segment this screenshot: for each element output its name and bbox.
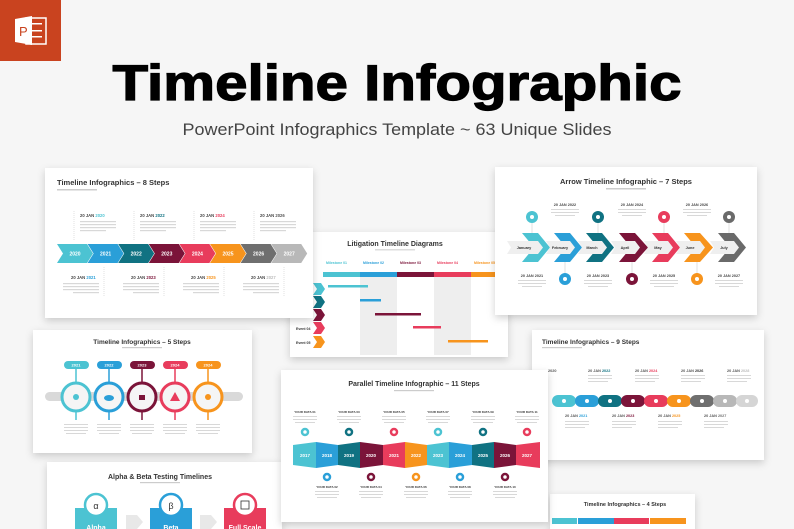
chevrons: 8 years: 2024 xyxy=(192,252,203,258)
chevrons: months: April xyxy=(621,246,629,250)
panel: arrow timeline 7 steps: Arrow Timeline Infographic – 7 Steps xyxy=(560,177,692,186)
panel: timeline 9 steps: 20 JAN 2025 xyxy=(658,414,680,418)
year blocks: 2023 xyxy=(433,453,444,458)
panel: arrow timeline 7 steps: 20 JAN 2023 xyxy=(587,274,609,278)
panel: timeline 5 steps: 2021 xyxy=(72,362,81,368)
panel: timeline 9 steps xyxy=(532,330,764,460)
panel: timeline 9 steps: 20 JAN 2026 xyxy=(681,369,703,373)
panel: parallel timeline 11 steps: YOUR DATA 01 xyxy=(294,410,316,414)
chevrons: months: January xyxy=(517,246,532,250)
year blocks: 2024 xyxy=(455,453,466,458)
chevrons: 8 years: 2022 xyxy=(131,252,142,258)
panel: timeline 9 steps: 2020 xyxy=(548,369,556,373)
panel: timeline 9 steps: 20 JAN 2028 xyxy=(727,369,749,373)
panel: litigation timeline xyxy=(290,232,508,357)
panel: timeline 4 steps xyxy=(550,494,695,529)
panel: timeline 5 steps: Timeline Infographics – 5 Steps xyxy=(93,339,191,346)
panel: timeline 8 steps xyxy=(45,168,313,318)
panel: arrow timeline 7 steps: 20 JAN 2024 xyxy=(621,203,644,207)
panel: timeline 8 steps: Timeline Infographics – 8 Steps xyxy=(57,178,169,187)
panel: litigation timeline: Event 04 xyxy=(296,327,310,331)
panel: parallel timeline 11 steps: YOUR DATA 09 xyxy=(472,410,494,414)
chevrons: months xyxy=(507,233,746,262)
panel: litigation timeline: Event 05 xyxy=(296,341,310,345)
year blocks: 2026 xyxy=(500,453,511,458)
chevrons: months: March xyxy=(586,246,598,250)
panel: parallel timeline 11 steps: YOUR DATA 08 xyxy=(449,485,471,489)
chevrons: 8 years: 2025 xyxy=(222,252,234,258)
panel: arrow timeline 7 steps: 20 JAN 2026 xyxy=(686,203,708,207)
panel: parallel timeline 11 steps: Parallel Timeline Infographic – 11 Steps xyxy=(348,381,480,388)
panel: timeline 9 steps: 20 JAN 2023 xyxy=(612,414,634,418)
chevrons: 8 years: 2021 xyxy=(100,252,111,258)
panel: parallel timeline 11 steps: YOUR DATA 07 xyxy=(427,410,449,414)
panel: timeline 8 steps: 20 JAN 2023 xyxy=(131,275,156,280)
chevrons: months: May xyxy=(654,246,663,250)
chevrons: 8 years: 2026 xyxy=(253,252,264,258)
panel: parallel timeline 11 steps: YOUR DATA 03 xyxy=(338,410,360,414)
panel: timeline 9 steps: 20 JAN 2021 xyxy=(565,414,587,418)
chevrons: 8 years: 2020 xyxy=(69,252,81,258)
panel: litigation timeline: Milestone 03 xyxy=(400,261,421,265)
year blocks: 2022 xyxy=(411,453,422,458)
panel: arrow timeline 7 steps: 20 JAN 2021 xyxy=(521,274,543,278)
panel: timeline 9 steps: 20 JAN 2027 xyxy=(704,414,726,418)
panel: litigation timeline: Milestone 05 xyxy=(474,261,495,265)
chevrons: months: July xyxy=(720,246,729,250)
subtitle: PowerPoint Infographics Template ~ 63 Unique Slides xyxy=(182,120,612,139)
chevrons: 8 years: 2027 xyxy=(284,252,295,258)
panel: timeline 5 steps: 2024 xyxy=(204,362,213,368)
panel: timeline 5 steps xyxy=(33,330,252,453)
panel: parallel timeline 11 steps xyxy=(281,370,548,522)
chevrons: 8 years xyxy=(57,244,307,263)
panel: timeline 5 steps: 2024 xyxy=(171,362,180,368)
panel: parallel timeline 11 steps: YOUR DATA 04 xyxy=(360,485,382,489)
panel: alpha beta testing: Alpha & Beta Testing Timelines xyxy=(108,474,212,481)
panel: timeline 8 steps: 20 JAN 2026 xyxy=(260,213,285,218)
year blocks: 2017 xyxy=(300,453,311,458)
panel: arrow timeline 7 steps: 20 JAN 2027 xyxy=(718,274,740,278)
year blocks: 2020 xyxy=(366,453,377,458)
panel: litigation timeline: Milestone 01 xyxy=(326,261,347,265)
panel: timeline 5 steps: 2022 xyxy=(105,362,114,368)
panel: parallel timeline 11 steps: YOUR DATA 05 xyxy=(383,410,405,414)
title: Timeline Infographic xyxy=(112,55,682,111)
panel: timeline 9 steps: Timeline Infographics – 9 Steps xyxy=(542,339,640,346)
panel: timeline 4 steps: Timeline Infographics – 4 Steps xyxy=(584,502,666,508)
panel: timeline 8 steps: 20 JAN 2020 xyxy=(80,213,105,218)
year blocks: 2021 xyxy=(389,453,400,458)
chevrons: months: February xyxy=(552,246,569,250)
panel: timeline 9 steps: 20 JAN 2022 xyxy=(588,369,610,373)
year blocks: 2018 xyxy=(322,453,333,458)
year blocks: 2025 xyxy=(478,453,489,458)
panel: alpha beta testing: β xyxy=(168,501,174,511)
panel: litigation timeline: Milestone 04 xyxy=(437,261,458,265)
panel: parallel timeline 11 steps: YOUR DATA 10 xyxy=(494,485,516,489)
icon: powerpoint logo: P xyxy=(19,24,28,39)
panel: litigation timeline: Milestone 02 xyxy=(363,261,384,265)
panel: timeline 5 steps: 2023 xyxy=(138,362,147,368)
panel: arrow timeline 7 steps: 20 JAN 2022 xyxy=(554,203,576,207)
panel: arrow timeline 7 steps: 20 JAN 2025 xyxy=(653,274,675,278)
panel: parallel timeline 11 steps: YOUR DATA 06 xyxy=(405,485,427,489)
icon: powerpoint logo xyxy=(0,0,61,61)
year blocks xyxy=(293,442,540,468)
panel: parallel timeline 11 steps: YOUR DATA 02 xyxy=(316,485,338,489)
panel: timeline 8 steps: 20 JAN 2022 xyxy=(140,213,165,218)
panel: litigation timeline: Litigation Timeline Diagrams xyxy=(347,241,443,248)
chevrons: months: June xyxy=(686,246,694,250)
panel: timeline 8 steps: 20 JAN 2027 xyxy=(251,275,276,280)
panel: alpha beta testing: α xyxy=(93,501,99,511)
panel: timeline 9 steps: 20 JAN 2024 xyxy=(635,369,658,373)
chevrons: 8 years: 2023 xyxy=(161,252,173,258)
panel: parallel timeline 11 steps: YOUR DATA 11 xyxy=(516,410,538,414)
panel: timeline 8 steps: 20 JAN 2025 xyxy=(191,275,216,280)
year blocks: 2027 xyxy=(522,453,533,458)
year blocks: 2019 xyxy=(344,453,355,458)
panel: timeline 8 steps: 20 JAN 2021 xyxy=(71,275,96,280)
panel: timeline 8 steps: 20 JAN 2024 xyxy=(200,213,225,218)
panel: arrow timeline 7 steps xyxy=(495,167,757,315)
panel: alpha beta testing xyxy=(47,462,282,529)
